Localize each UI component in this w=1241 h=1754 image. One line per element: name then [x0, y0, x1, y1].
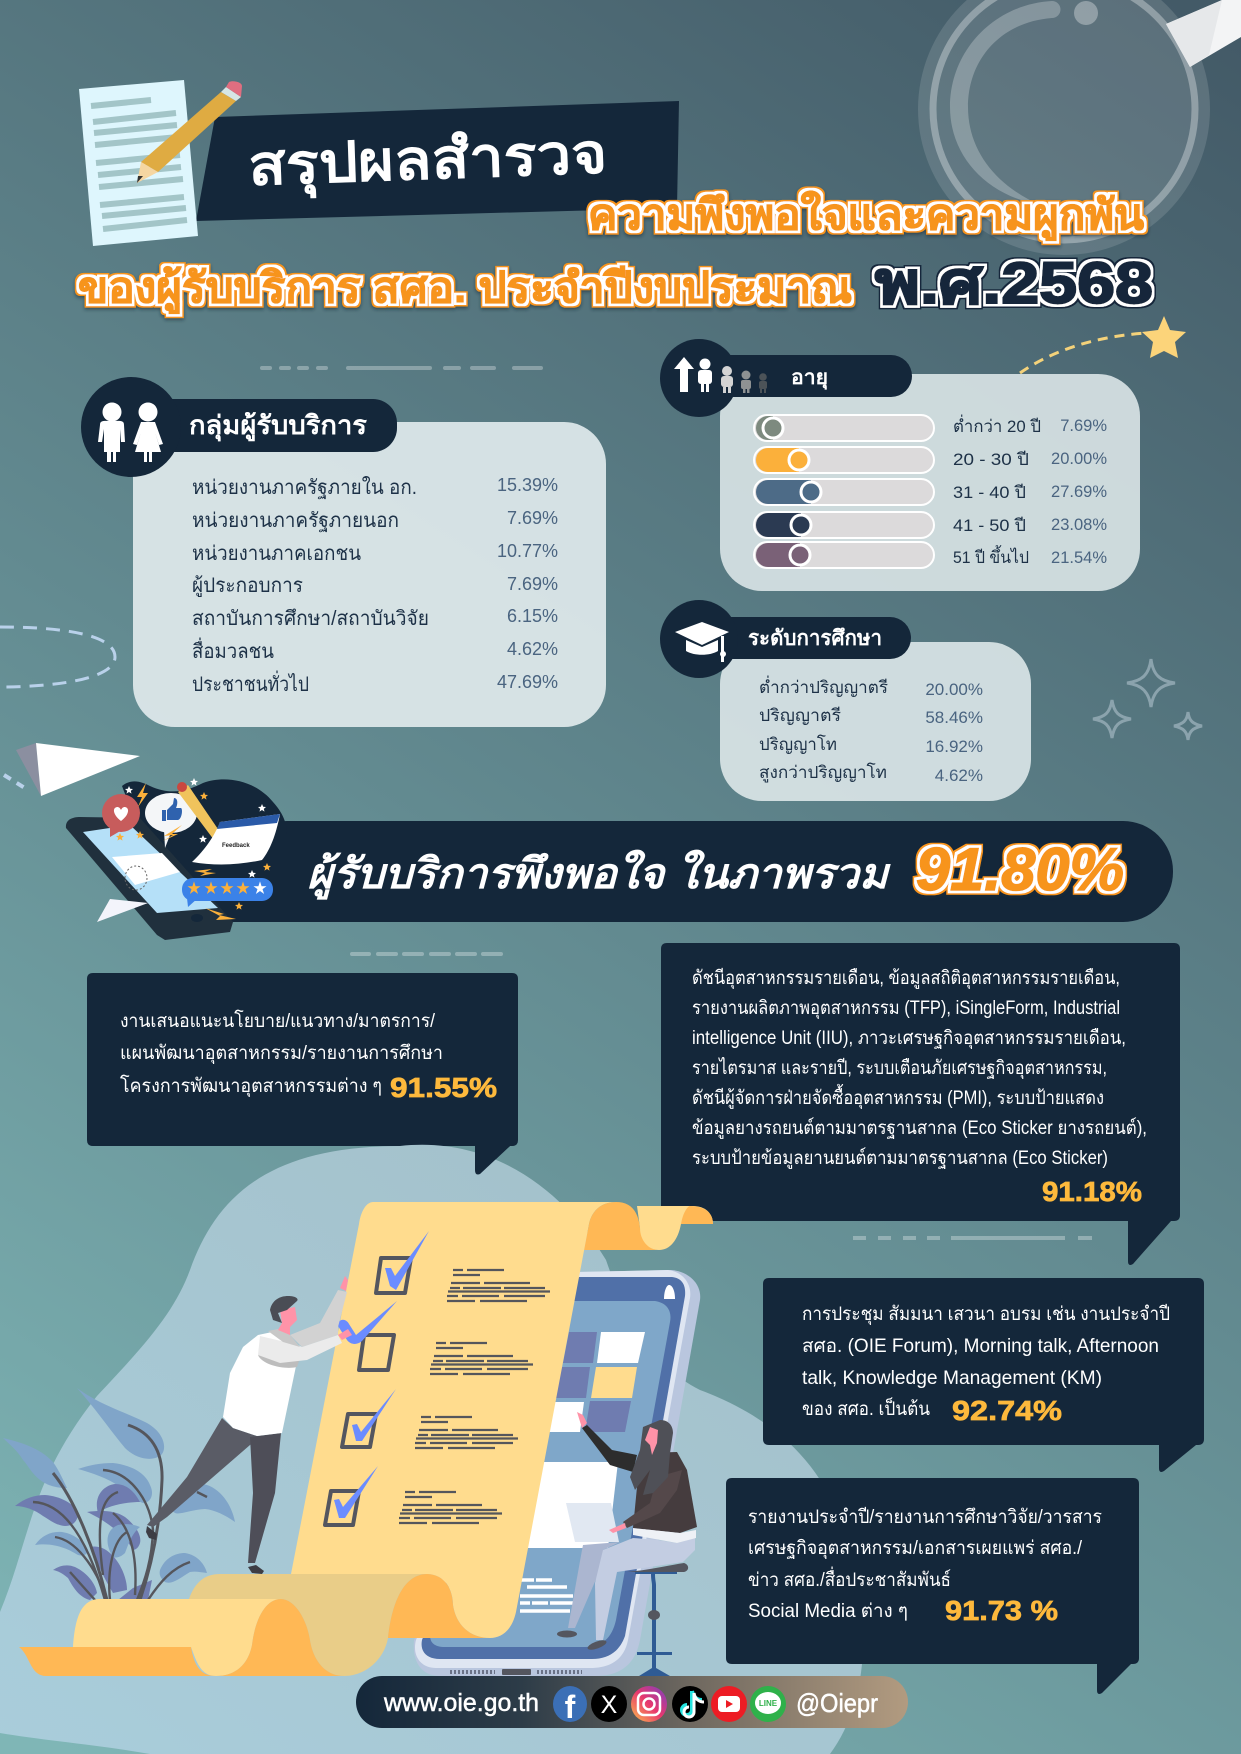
speech box: datasets: intelligence Unit (IIU), ภาวะเศรษฐกิจอุตสาหกรรมรายเดือน, [692, 1028, 1126, 1050]
group rows: ผู้ประกอบการ [192, 575, 303, 598]
overall satisfaction banner [237, 821, 1173, 922]
title line: สรุปผลสำรวจ: สรุปผลสำรวจ [247, 122, 608, 201]
paper plane top right [1166, 0, 1241, 67]
education header [660, 600, 911, 678]
age rows: 20 - 30 ปี [953, 450, 1029, 469]
paper plane left [4, 743, 140, 796]
group rows: หน่วยงานภาครัฐภายใน อก. [192, 476, 417, 499]
icon: phone with feedback [66, 778, 287, 940]
illustration: scroll checklist [19, 1202, 713, 1676]
education rows: 4.62% [935, 766, 983, 785]
panel: age [660, 339, 1140, 591]
age bars [754, 415, 934, 568]
group rows: สถาบันการศึกษา/สถาบันวิจัย [192, 608, 429, 630]
speech box: datasets: ระบบป้ายข้อมูลยานยนต์ตามมาตรฐานสากล (Eco Sticker) [692, 1147, 1108, 1169]
illustration: plant [3, 1388, 235, 1600]
light blob behind illustration [0, 1145, 863, 1754]
speech box tail over blob [475, 1146, 510, 1174]
group rows [192, 475, 558, 696]
decorative circle top right [918, 0, 1210, 255]
group rows: หน่วยงานภาครัฐภายนอก [192, 510, 399, 532]
icon: facebook: f [565, 1689, 576, 1725]
age rows: 21.54% [1051, 549, 1107, 567]
speech box: publications: ข่าว สศอ./สื่อประชาสัมพันธ์ [748, 1566, 951, 1591]
age rows: 27.69% [1051, 483, 1107, 501]
panel: service recipient groups [81, 377, 606, 727]
education rows: 58.46% [925, 708, 983, 727]
speech box: meetings [763, 1278, 1204, 1472]
age rows [953, 414, 1107, 567]
overall satisfaction number: 91.80% [916, 836, 1124, 903]
speech box: policy: โครงการพัฒนาอุตสาหกรรมต่าง ๆ [120, 1074, 382, 1098]
illustration: man [146, 1276, 352, 1574]
icon: line [750, 1686, 786, 1722]
icon: tiktok [672, 1686, 708, 1722]
overall satisfaction text: ผู้รับบริการพึงพอใจ ในภาพรวม [307, 849, 891, 900]
sparkles [1093, 659, 1202, 740]
heading: year: พ.ศ.2568 [875, 251, 1153, 316]
like bubble [145, 793, 197, 848]
rating bubble: ★ [204, 880, 218, 896]
panel header: กลุ่มผู้รับบริการ [189, 410, 367, 442]
feedback paper [192, 814, 280, 864]
rating bubble: ★ [220, 880, 234, 896]
group rows: หน่วยงานภาคเอกชน [192, 543, 361, 565]
speech box: policy: งานเสนอแนะนโยบาย/แนวทาง/มาตรการ/ [120, 1009, 436, 1032]
group rows: 7.69% [507, 508, 558, 528]
age header [660, 339, 912, 417]
education rows: ต่ำกว่าปริญญาตรี [759, 675, 888, 697]
icon: paper and pencil [79, 80, 242, 246]
panel: education level [660, 600, 1031, 801]
heart bubble [102, 794, 140, 837]
star with dashed trail [1020, 316, 1186, 373]
speech box: datasets: รายงานผลิตภาพอุตสาหกรรม (TFP), iSingleForm, Industrial [692, 998, 1120, 1020]
handle: @Oiepr [796, 1688, 878, 1718]
age rows: 31 - 40 ปี [953, 483, 1026, 502]
main sheet [291, 1202, 616, 1638]
education rows: ปริญญาโท [759, 734, 837, 754]
heading: ของผู้รับบริการ: ของผู้รับบริการ สศอ. ประจำปีงบประมาณ [78, 264, 852, 314]
group rows: 7.69% [507, 574, 558, 594]
rating bubble: ★ [253, 880, 267, 896]
education rows [759, 675, 983, 785]
group rows: 15.39% [497, 475, 558, 495]
rating bubble: ★ [187, 880, 201, 896]
speech box: publications: เศรษฐกิจอุตสาหกรรม/เอกสารเผยแพร่ สศอ./ [748, 1538, 1083, 1560]
education rows: 16.92% [925, 737, 983, 756]
group rows: ประชาชนทั่วไป [192, 670, 309, 696]
small plane [97, 899, 148, 922]
icon: facebook [553, 1686, 587, 1725]
speech box: meetings: ของ สศอ. เป็นต้น [802, 1396, 930, 1420]
checklist boxes [325, 1258, 411, 1525]
group rows: สื่อมวลชน [192, 637, 274, 663]
speech box: meetings: talk, Knowledge Management (KM) [802, 1368, 1102, 1389]
group rows: 4.62% [507, 639, 558, 659]
speech box: datasets: ดัชนีอุตสาหกรรมรายเดือน, ข้อมูลสถิติอุตสาหกรรมรายเดือน, [692, 967, 1120, 990]
icon: x [591, 1686, 627, 1722]
age header: อายุ [791, 367, 828, 390]
education rows: ปริญญาตรี [759, 706, 841, 725]
age rows: 23.08% [1051, 516, 1107, 534]
panel header [81, 377, 397, 477]
lightning and stars [116, 778, 271, 920]
group rows: 47.69% [497, 672, 558, 692]
speech box: meetings: การประชุม สัมมนา เสวนา อบรม เช่น งานประจำปี [802, 1303, 1170, 1326]
speech box: policy: แผนพัฒนาอุตสาหกรรม/รายงานการศึกษา [120, 1043, 443, 1065]
speech box: datasets: รายไตรมาส และรายปี, ระบบเตือนภัยเศรษฐกิจอุตสาหกรรม, [692, 1057, 1107, 1080]
speech box: datasets [661, 943, 1180, 1265]
speech box: meetings: 92.74% [952, 1395, 1062, 1426]
checklist text lines [399, 1270, 550, 1523]
pencil [177, 782, 222, 842]
rating bubble [182, 878, 273, 907]
title banner [196, 101, 679, 221]
age rows: 51 ปี ขึ้นไป [953, 545, 1029, 567]
footer bar [356, 1676, 908, 1728]
icon: instagram [631, 1686, 667, 1722]
age rows: 41 - 50 ปี [953, 516, 1026, 535]
speech box: datasets: ดัชนีผู้จัดการฝ่ายจัดซื้ออุตสาหกรรม (PMI), ระบบป้ายแสดง [692, 1084, 1104, 1110]
speech box: publications [726, 1478, 1139, 1694]
illustration: big phone [414, 1270, 700, 1676]
speech box: meetings: สศอ. (OIE Forum), Morning talk, Afternoon [802, 1336, 1159, 1357]
education rows: สูงกว่าปริญญาโท [759, 762, 887, 783]
icon: youtube [711, 1686, 747, 1722]
phone [66, 817, 233, 940]
speech box: publications: Social Media ต่าง ๆ [748, 1601, 908, 1622]
speech box: policy: 91.55% [390, 1072, 497, 1103]
speech box: datasets: 91.18% [1042, 1176, 1142, 1207]
speech box: publications: รายงานประจำปี/รายงานการศึกษาวิจัย/วารสาร [748, 1506, 1102, 1528]
heading: ความพึงพอใจและความผูกพัน: ความพึงพอใจและความผูกพัน [588, 190, 1144, 241]
speech box: datasets: ข้อมูลยางรถยนต์ตามมาตรฐานสากล (Eco Sticker ยางรถยนต์), [692, 1117, 1147, 1139]
checklist ticks [334, 1231, 429, 1518]
icon: line: LINE [759, 1699, 778, 1708]
group rows: 10.77% [497, 541, 558, 561]
age rows: 20.00% [1051, 450, 1107, 468]
group rows: 6.15% [507, 606, 558, 626]
speech box: policy [87, 973, 518, 1174]
website: www.oie.go.th [383, 1689, 539, 1717]
age rows: 7.69% [1060, 417, 1107, 435]
age rows: ต่ำกว่า 20 ปี [953, 414, 1041, 436]
education rows: 20.00% [925, 680, 983, 699]
feedback paper: Feedback [222, 843, 250, 849]
illustration: woman [557, 1412, 697, 1676]
rating bubble: ★ [236, 880, 250, 896]
speech box: publications: 91.73 % [945, 1595, 1058, 1626]
icon: x: X [601, 1691, 618, 1719]
education header: ระดับการศึกษา [748, 627, 882, 650]
